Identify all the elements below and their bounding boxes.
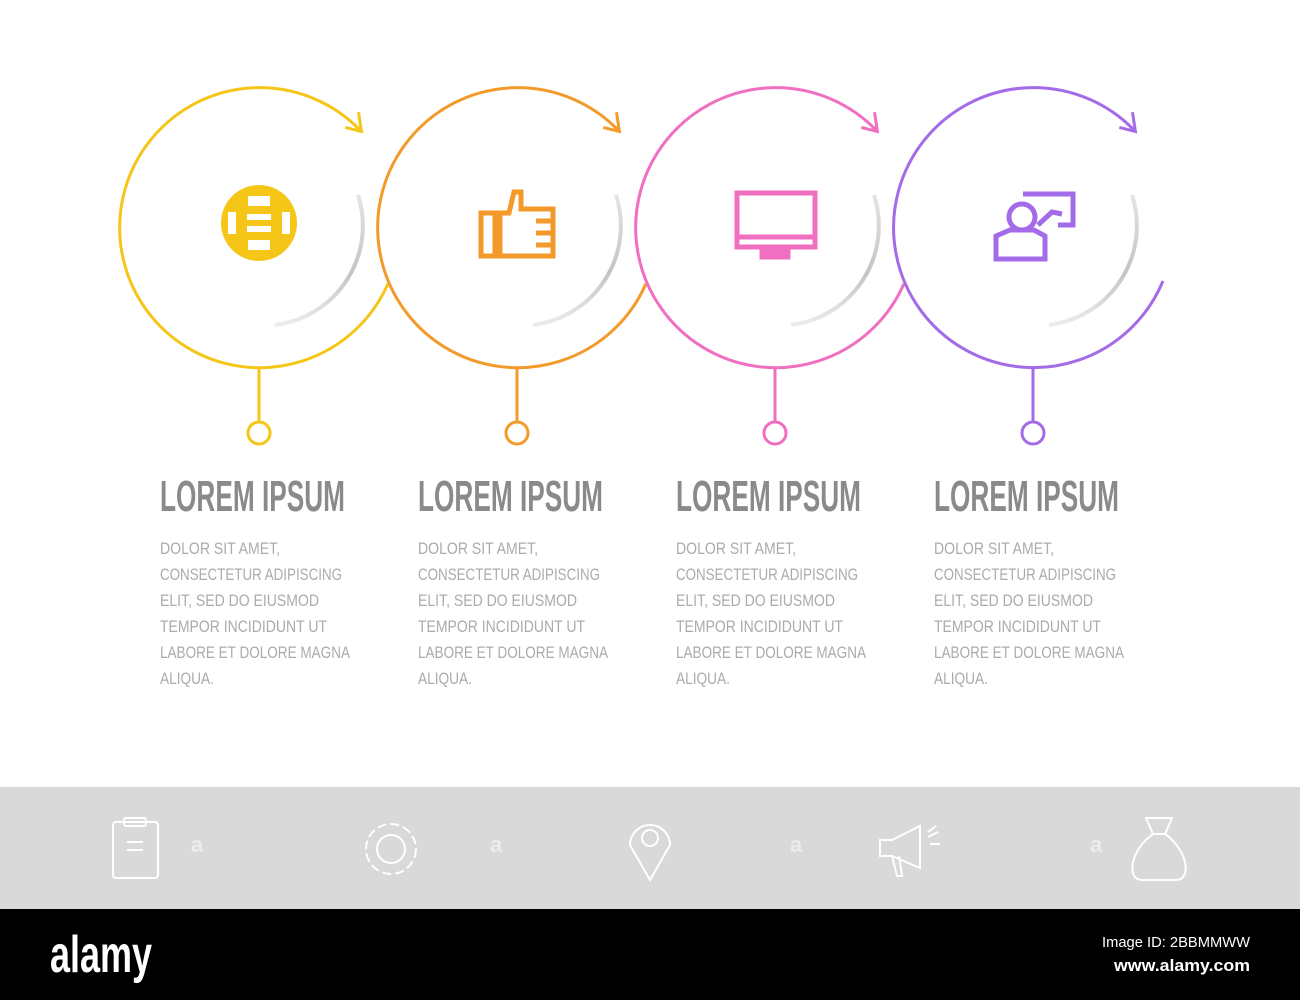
bottom icon band: a: [1090, 832, 1103, 857]
icon: clipboard: [113, 818, 158, 878]
body text 4: DOLOR SIT AMET,: [934, 539, 1054, 558]
body text 4: TEMPOR INCIDIDUNT UT: [934, 617, 1101, 636]
icon: sack: [1132, 818, 1186, 880]
step 2: orange circle: [378, 88, 646, 444]
body text 3: DOLOR SIT AMET,: [676, 539, 796, 558]
step 1: yellow circle: [120, 88, 388, 444]
text blocks: [160, 472, 1119, 521]
bottom icon band: a: [490, 832, 503, 857]
body text 3: CONSECTETUR ADIPISCING: [676, 565, 858, 584]
body text 1: CONSECTETUR ADIPISCING: [160, 565, 342, 584]
body text 2: LABORE ET DOLORE MAGNA: [418, 643, 609, 662]
body text 2: CONSECTETUR ADIPISCING: [418, 565, 600, 584]
body text 3: TEMPOR INCIDIDUNT UT: [676, 617, 843, 636]
body text 2: [418, 539, 609, 688]
body text 4: LABORE ET DOLORE MAGNA: [934, 643, 1125, 662]
body text 1: ALIQUA.: [160, 669, 214, 688]
body text 1: [160, 539, 351, 688]
icon: location pin: [630, 825, 670, 880]
url: www.alamy.com: [1113, 956, 1250, 975]
body text 1: ELIT, SED DO EIUSMOD: [160, 591, 319, 610]
body text 1: LABORE ET DOLORE MAGNA: [160, 643, 351, 662]
bottom icon band: a: [790, 832, 803, 857]
bottom icon band: [0, 787, 1300, 909]
body text 4: ELIT, SED DO EIUSMOD: [934, 591, 1093, 610]
body text 4: CONSECTETUR ADIPISCING: [934, 565, 1116, 584]
body text 3: ALIQUA.: [676, 669, 730, 688]
body text 2: TEMPOR INCIDIDUNT UT: [418, 617, 585, 636]
body text 2: ELIT, SED DO EIUSMOD: [418, 591, 577, 610]
icon: megaphone: [880, 826, 940, 876]
icon: gear: [366, 824, 416, 874]
body text 2: DOLOR SIT AMET,: [418, 539, 538, 558]
step 3: pink circle: [636, 88, 904, 444]
title 1: LOREM IPSUM: [160, 472, 345, 521]
body text 4: [934, 539, 1125, 688]
icon: person with chart: [996, 194, 1073, 259]
body text 2: ALIQUA.: [418, 669, 472, 688]
title 4: LOREM IPSUM: [934, 472, 1119, 521]
icon: monitor: [737, 193, 815, 257]
logo: alamy: [50, 926, 152, 984]
image id: Image ID: 2BBMMWW: [1102, 934, 1251, 951]
body text 3: ELIT, SED DO EIUSMOD: [676, 591, 835, 610]
step 4: purple circle: [894, 88, 1163, 444]
body text 4: ALIQUA.: [934, 669, 988, 688]
bottom icon band: a: [191, 832, 204, 857]
body text 1: TEMPOR INCIDIDUNT UT: [160, 617, 327, 636]
icon: thumbs up: [481, 192, 553, 256]
title 3: LOREM IPSUM: [676, 472, 861, 521]
body text 3: LABORE ET DOLORE MAGNA: [676, 643, 867, 662]
title 2: LOREM IPSUM: [418, 472, 603, 521]
icon: globe: [221, 185, 297, 261]
body text 1: DOLOR SIT AMET,: [160, 539, 280, 558]
footer: [0, 909, 1300, 1000]
body text 3: [676, 539, 867, 688]
